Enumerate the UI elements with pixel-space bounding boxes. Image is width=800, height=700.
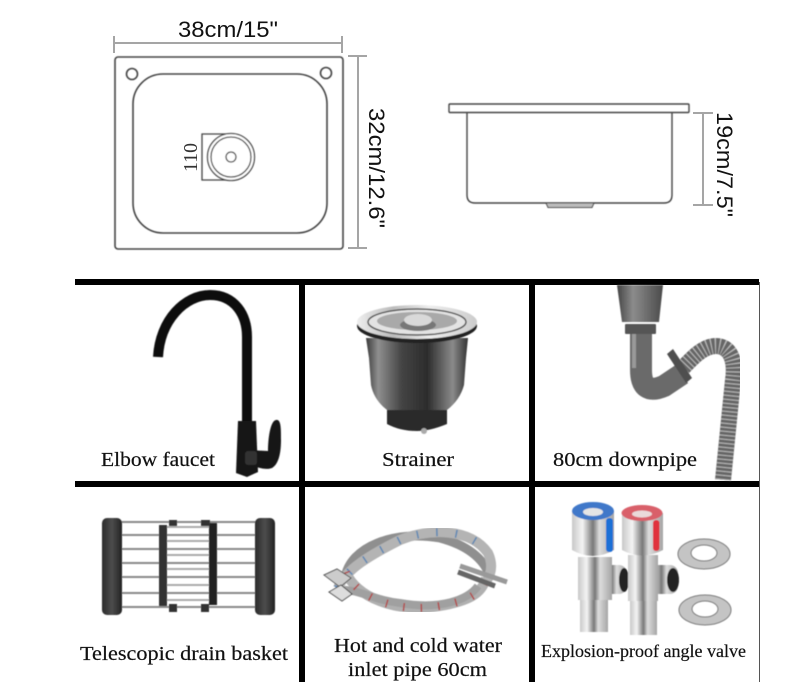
caption: Elbow faucet (101, 449, 215, 471)
panel: downpipe (553, 285, 734, 480)
dimension: height: 19cm/7.5" (712, 112, 737, 217)
icon: drain basket (102, 518, 275, 615)
icon: blue valve (572, 502, 629, 632)
panel: telescopic drain basket (80, 518, 288, 665)
panel: water inlet pipes (324, 532, 507, 681)
icon: faucet (158, 295, 281, 477)
panel: strainer (357, 305, 477, 471)
sink outline side (449, 104, 689, 208)
dimension: depth (348, 56, 389, 248)
dimension: height (693, 112, 737, 217)
icon: flange rings (678, 539, 731, 625)
icon: angle valves (572, 502, 731, 635)
caption: Hot and cold water (334, 635, 502, 657)
drain hole (202, 134, 254, 180)
diagram: sink top view (114, 17, 389, 249)
icon: braided hoses (324, 532, 507, 608)
caption: 80cm downpipe (553, 449, 697, 471)
caption: Strainer (382, 449, 454, 471)
icon: downpipe (617, 285, 734, 480)
label: 110: 110 (180, 143, 202, 172)
icon: red valve (622, 505, 679, 635)
sink outline top (115, 57, 343, 249)
panel: angle valves (541, 502, 746, 661)
dimension: width: 38cm/15" (178, 17, 278, 42)
dimension: width (114, 17, 342, 53)
caption: Telescopic drain basket (80, 643, 288, 665)
caption: Explosion-proof angle valve (541, 641, 746, 661)
icon: strainer (357, 305, 477, 434)
dimension: depth: 32cm/12.6" (364, 108, 389, 228)
diagram: sink side view (449, 104, 737, 217)
caption: inlet pipe 60cm (348, 659, 487, 681)
caption (334, 635, 502, 681)
panel: elbow faucet (101, 295, 281, 477)
